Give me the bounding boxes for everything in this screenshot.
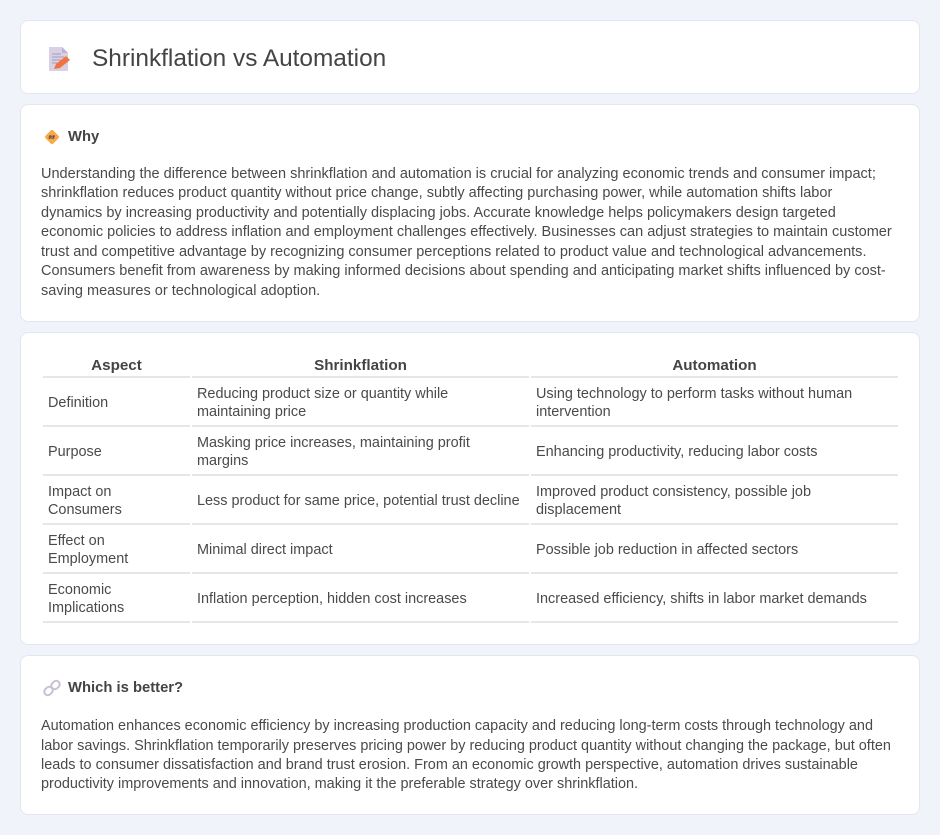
table row: purpose: Purpose [48, 444, 102, 460]
text block: which is better paragraph: labor savings. Shrinkflation temporarily preserves pricing power by reducing product quantity without changing the package, but often [41, 738, 891, 754]
heading: which is better: Which is better? [68, 680, 183, 696]
panel: comparison table [20, 332, 920, 645]
icon: memo with pencil [49, 47, 70, 71]
table row: definition: Reducing product size or quantity while [197, 386, 448, 402]
table row: effect on employment [43, 533, 898, 574]
table header [43, 357, 898, 378]
table row: effect on employment: Minimal direct impact [197, 542, 333, 558]
table row: purpose [43, 435, 898, 476]
table row: impact on consumers [43, 484, 898, 525]
table row: impact on consumers: Impact on [48, 484, 111, 500]
table row: definition: intervention [536, 404, 611, 420]
table row: definition: Using technology to perform tasks without human [536, 386, 852, 402]
table row: purpose: Masking price increases, maintaining profit [197, 435, 470, 451]
text block: which is better paragraph: leads to consumer dissatisfaction and brand trust erosion. From an economic growth perspective, automation drives sustainable [41, 757, 858, 773]
text block: why paragraph: Consumers benefit from awareness by making informed decisions about spending and anticipating market shifts influenced by cost- [41, 263, 886, 279]
panel: why [20, 104, 920, 322]
table header: Aspect [91, 357, 142, 374]
table header: Automation [672, 357, 757, 374]
table row: economic implications: Implications [48, 600, 124, 616]
icon: link [43, 680, 61, 696]
table row: economic implications: Increased efficiency, shifts in labor market demands [536, 591, 867, 607]
table row: impact on consumers: displacement [536, 502, 621, 518]
table row: impact on consumers: Consumers [48, 502, 122, 518]
table row: effect on employment: Possible job reduction in affected sectors [536, 542, 798, 558]
text block: why paragraph: shrinkflation reduces product quantity without price change, subtly affecting purchasing power, while automation shifts labor [41, 185, 832, 201]
table row: economic implications [43, 582, 898, 623]
table row: purpose: margins [197, 453, 248, 469]
text block: why paragraph: trust and competitive advantage by recognizing consumer perceptions related to product value and technological advancements. [41, 244, 866, 260]
text block: why paragraph: saving measures or technological adoption. [41, 283, 320, 299]
text block: why paragraph: economic policies to address inflation and employment challenges effectively. Businesses can adjust strategies to maintain customer [41, 224, 892, 240]
table row: economic implications: Inflation perception, hidden cost increases [197, 591, 467, 607]
table row: definition: Definition [48, 395, 108, 411]
table row: impact on consumers: Less product for same price, potential trust decline [197, 493, 520, 509]
heading: why: Why [68, 129, 99, 145]
table row: definition: maintaining price [197, 404, 306, 420]
text block: why paragraph: dynamics by increasing productivity and potentially displacing jobs. Accurate knowledge helps policymakers design targeted [41, 205, 836, 221]
table row: purpose: Enhancing productivity, reducing labor costs [536, 444, 817, 460]
table row: impact on consumers: Improved product consistency, possible job [536, 484, 811, 500]
table row: effect on employment: Effect on [48, 533, 105, 549]
text block: which is better paragraph: Automation enhances economic efficiency by increasing production capacity and reducing long-term costs through technology and [41, 718, 873, 734]
panel: title [20, 20, 920, 94]
table header: Shrinkflation [314, 357, 407, 374]
text block: why paragraph: Understanding the difference between shrinkflation and automation is crucial for analyzing economic trends and consumer impact; [41, 166, 876, 182]
text block: which is better paragraph [41, 718, 891, 792]
heading: page title: Shrinkflation vs Automation [92, 45, 386, 72]
icon: warning diamond [45, 130, 59, 144]
text block: which is better paragraph: productivity improvements and innovation, making it the preferable strategy over shrinkflation. [41, 776, 638, 792]
table row: definition [43, 386, 898, 427]
panel: which is better [20, 655, 920, 815]
text block: why paragraph [41, 166, 892, 299]
table row: economic implications: Economic [48, 582, 111, 598]
table row: effect on employment: Employment [48, 551, 128, 567]
